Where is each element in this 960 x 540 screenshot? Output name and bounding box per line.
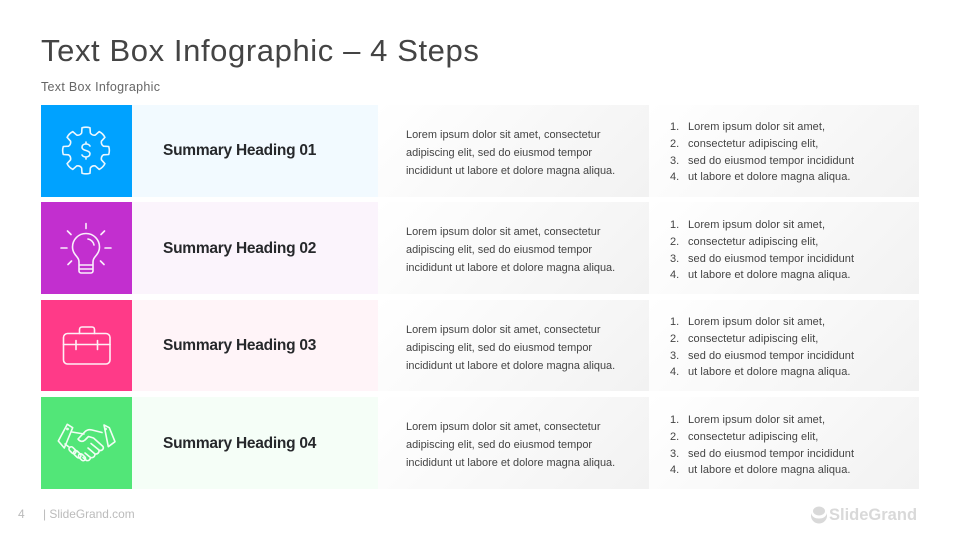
description text: Lorem ipsum dolor sit amet, consectetur xyxy=(406,226,601,238)
logo text: SlideGrand xyxy=(829,506,917,524)
numbered list: 2. xyxy=(670,236,679,248)
numbered list: ut labore et dolore magna aliqua. xyxy=(688,366,850,378)
numbered list: Lorem ipsum dolor sit amet, xyxy=(688,414,825,426)
description text xyxy=(378,202,649,294)
description text xyxy=(378,397,649,489)
numbered list: 2. xyxy=(670,138,679,150)
numbered list: 4. xyxy=(670,269,679,281)
description text: incididunt ut labore et dolore magna aliqua. xyxy=(406,262,615,274)
numbered list: 1. xyxy=(670,414,679,426)
numbered list xyxy=(649,202,919,294)
heading block xyxy=(132,202,378,294)
description text: incididunt ut labore et dolore magna aliqua. xyxy=(406,165,615,177)
numbered list: 3. xyxy=(670,448,679,460)
numbered list: 4. xyxy=(670,366,679,378)
numbered list: ut labore et dolore magna aliqua. xyxy=(688,464,850,476)
row 4 xyxy=(41,397,919,489)
description text: Lorem ipsum dolor sit amet, consectetur xyxy=(406,421,601,433)
heading block: Summary Heading 01 xyxy=(163,142,316,159)
heading block xyxy=(132,105,378,197)
numbered list: sed do eiusmod tempor incididunt xyxy=(688,253,854,265)
icon: gear with dollar sign xyxy=(41,105,132,197)
numbered list: sed do eiusmod tempor incididunt xyxy=(688,448,854,460)
heading block xyxy=(132,397,378,489)
description text: adipiscing elit, sed do eiusmod tempor xyxy=(406,439,592,451)
numbered list: 1. xyxy=(670,121,679,133)
numbered list: consectetur adipiscing elit, xyxy=(688,431,818,443)
numbered list: 2. xyxy=(670,431,679,443)
numbered list xyxy=(649,397,919,489)
description text: Lorem ipsum dolor sit amet, consectetur xyxy=(406,129,601,141)
logo xyxy=(811,506,917,524)
heading block: Summary Heading 04 xyxy=(163,435,316,452)
description text xyxy=(378,105,649,197)
numbered list xyxy=(649,300,919,391)
numbered list: sed do eiusmod tempor incididunt xyxy=(688,350,854,362)
heading block: Summary Heading 02 xyxy=(163,240,316,257)
numbered list: 1. xyxy=(670,219,679,231)
row 1 xyxy=(41,105,919,197)
numbered list: consectetur adipiscing elit, xyxy=(688,236,818,248)
heading block xyxy=(132,300,378,391)
row 2 xyxy=(41,202,919,294)
numbered list: consectetur adipiscing elit, xyxy=(688,333,818,345)
numbered list: 2. xyxy=(670,333,679,345)
description text: Lorem ipsum dolor sit amet, consectetur xyxy=(406,324,601,336)
numbered list: Lorem ipsum dolor sit amet, xyxy=(688,316,825,328)
title: Text Box Infographic – 4 Steps xyxy=(41,33,479,68)
description text xyxy=(378,300,649,391)
heading block: Summary Heading 03 xyxy=(163,336,316,354)
footer source: | SlideGrand.com xyxy=(43,507,135,521)
numbered list: Lorem ipsum dolor sit amet, xyxy=(688,121,825,133)
numbered list: Lorem ipsum dolor sit amet, xyxy=(688,219,825,231)
numbered list xyxy=(649,105,919,197)
description text: adipiscing elit, sed do eiusmod tempor xyxy=(406,147,592,159)
numbered list: 3. xyxy=(670,253,679,265)
numbered list: sed do eiusmod tempor incididunt xyxy=(688,155,854,167)
icon: logo mark xyxy=(811,506,827,524)
description text: adipiscing elit, sed do eiusmod tempor xyxy=(406,342,592,354)
numbered list: 3. xyxy=(670,350,679,362)
icon: handshake xyxy=(41,397,132,489)
numbered list: 4. xyxy=(670,464,679,476)
description text: incididunt ut labore et dolore magna aliqua. xyxy=(406,360,615,372)
description text: incididunt ut labore et dolore magna aliqua. xyxy=(406,457,615,469)
numbered list: 3. xyxy=(670,155,679,167)
numbered list: ut labore et dolore magna aliqua. xyxy=(688,269,850,281)
icon: briefcase xyxy=(41,300,132,391)
row 3 xyxy=(41,300,919,391)
description text: adipiscing elit, sed do eiusmod tempor xyxy=(406,244,592,256)
subtitle: Text Box Infographic xyxy=(41,80,160,94)
numbered list: 1. xyxy=(670,316,679,328)
icon: light bulb xyxy=(41,202,132,294)
numbered list: ut labore et dolore magna aliqua. xyxy=(688,171,850,183)
numbered list: 4. xyxy=(670,171,679,183)
numbered list: consectetur adipiscing elit, xyxy=(688,138,818,150)
page number: 4 xyxy=(18,507,25,521)
